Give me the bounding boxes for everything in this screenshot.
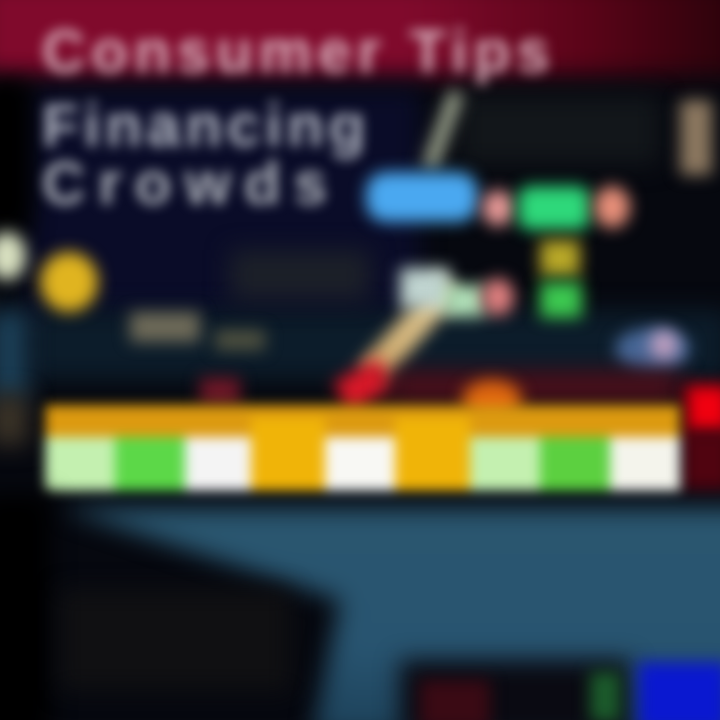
- illustration: right tan tag: [680, 100, 712, 175]
- title line 2: Financing: [42, 92, 370, 159]
- red top accent above strip: [200, 378, 240, 404]
- left white circle icon: [0, 232, 26, 280]
- segment 1: [45, 437, 115, 491]
- illustration: blue shape: [366, 172, 478, 222]
- blue pink small node: [615, 328, 690, 370]
- top crimson band: [0, 0, 720, 75]
- tan label blob small: [215, 330, 265, 350]
- grey text blocks near coin: [230, 250, 370, 300]
- illustration: green node: [518, 186, 590, 230]
- dark navy panel behind title: [30, 90, 420, 320]
- pale blue-white blob: [400, 268, 450, 308]
- strip top orange band: [45, 405, 680, 437]
- tan label blobs: [130, 312, 200, 342]
- orange peak: [462, 380, 522, 420]
- bottom right blue block: [638, 662, 720, 720]
- segment 6: [395, 417, 470, 491]
- segment 9: [610, 437, 680, 491]
- left tan strip: [0, 395, 28, 445]
- lower left black area: [0, 495, 50, 720]
- mid-section dark teal background: [30, 310, 720, 380]
- illustration: yellow connector: [540, 240, 580, 276]
- bottom dark block: [400, 660, 630, 720]
- illustration: green connector: [540, 282, 582, 318]
- pink blob: [482, 278, 514, 316]
- black left edge: [0, 80, 30, 230]
- title: [36, 18, 556, 217]
- illustration: antenna strokes: [423, 90, 463, 170]
- title line 1: Consumer Tips: [42, 18, 556, 85]
- lower left text block: [60, 590, 290, 690]
- segment 8: [540, 437, 610, 491]
- small pink node: [650, 330, 678, 360]
- illustration: pink node left: [482, 190, 514, 226]
- mint blob: [445, 285, 485, 317]
- illustration: orange node right: [594, 186, 630, 228]
- bottom green accent: [590, 672, 620, 720]
- segment 5: [325, 437, 395, 491]
- right dark panel: [460, 95, 660, 165]
- segment 4: [251, 417, 325, 491]
- red right block: [686, 385, 720, 435]
- colour strip: [35, 395, 690, 501]
- diagonal pencil: [359, 275, 461, 385]
- segment 3: [185, 437, 251, 491]
- segment 7: [470, 437, 540, 491]
- dark red right strip: [682, 430, 720, 490]
- dark red band right of pencil: [390, 372, 680, 402]
- left mid strip blue: [0, 310, 28, 400]
- lower steel blue panel: [68, 493, 720, 720]
- steel panel shape: [60, 508, 720, 720]
- yellow coin icon: [40, 252, 98, 312]
- segment 2: [115, 437, 185, 491]
- bottom red accent: [420, 680, 490, 720]
- pencil red tip: [333, 357, 395, 413]
- title line 3: Crowds: [42, 150, 340, 217]
